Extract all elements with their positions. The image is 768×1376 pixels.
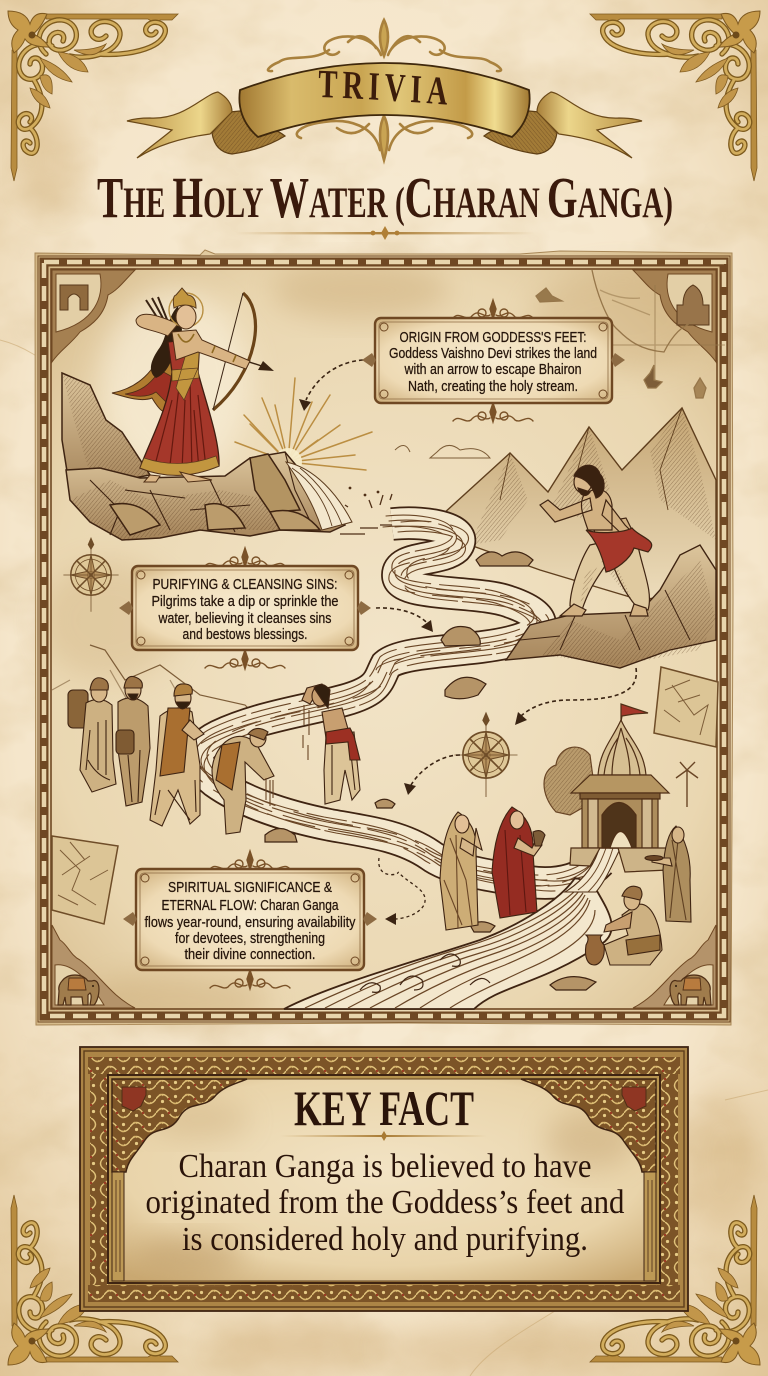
callout: spiritual significance and eternal flow: their divine connection. bbox=[184, 947, 316, 963]
arch spandrel left bbox=[112, 1079, 247, 1172]
map parchment and frame bbox=[35, 250, 733, 1030]
pillar left bbox=[112, 1172, 124, 1281]
woman with offering plate bbox=[645, 826, 691, 922]
palm bbox=[676, 762, 698, 807]
distant hills, middle left bbox=[52, 645, 262, 722]
callout: purifying and cleansing sins: water, believing it cleanses sins bbox=[158, 611, 332, 627]
pillar right bbox=[644, 1172, 656, 1281]
scroll above bbox=[453, 300, 533, 319]
ornate frame bbox=[80, 1047, 688, 1311]
key fact heading: KEY FACT bbox=[294, 1080, 474, 1136]
callout: purifying and cleansing sins: Pilgrims take a dip or sprinkle the bbox=[152, 594, 338, 610]
callout: spiritual significance and eternal flow: ETERNAL FLOW: Charan Ganga bbox=[162, 897, 339, 914]
corner ornament: top left bbox=[8, 11, 178, 181]
icon: elephant right bbox=[670, 975, 711, 1005]
callout: purifying and cleansing sins: PURIFYING & CLEANSING SINS: bbox=[152, 576, 338, 593]
seated devotee with pot bbox=[585, 886, 662, 965]
corner ornament: top right bbox=[590, 11, 760, 181]
bottom corner scroll, right bbox=[633, 925, 716, 1008]
callout: origin from goddess's feet: Goddess Vaishno Devi strikes the land bbox=[389, 346, 597, 362]
scroll below bbox=[210, 970, 290, 989]
icon: compass left bbox=[63, 538, 119, 612]
key fact body bbox=[146, 1148, 625, 1258]
old map sheet, right bbox=[654, 667, 718, 747]
ornament below ribbon bbox=[297, 116, 472, 160]
quiver bbox=[146, 297, 168, 325]
waterfall and splash bbox=[286, 462, 401, 534]
feet bbox=[144, 472, 212, 482]
gold hem and waist bbox=[140, 338, 219, 475]
pilgrim praying in ochre bbox=[150, 684, 204, 826]
left ribbon tail bbox=[127, 92, 285, 158]
callout: spiritual significance and eternal flow bbox=[123, 851, 377, 989]
goddess Vaishno Devi with bow bbox=[112, 288, 274, 482]
pilgrim bending to collect water bbox=[212, 728, 274, 834]
scroll above bbox=[205, 548, 285, 567]
title divider bbox=[235, 226, 535, 240]
ribbon banner with TRIVIA bbox=[126, 17, 642, 164]
callout: origin from goddess's feet: with an arrow to escape Bhairon bbox=[404, 362, 582, 378]
scroll above bbox=[210, 851, 290, 870]
red sari bbox=[140, 338, 219, 475]
trivia heading bbox=[318, 70, 447, 105]
bow and arrow bbox=[202, 293, 274, 410]
old map sheet, left bbox=[52, 836, 118, 924]
arrow: river to spiritual label bbox=[379, 858, 425, 925]
corner arch: domed monument bbox=[633, 270, 716, 362]
Bhairon Nath running figure bbox=[540, 465, 652, 616]
rocks under the man bbox=[506, 545, 716, 668]
callout: purifying and cleansing sins: and bestows blessings. bbox=[182, 627, 308, 643]
key fact body: Charan Ganga is believed to have bbox=[178, 1148, 592, 1185]
river: middle course bbox=[189, 515, 609, 891]
main title: THE HOLY WATER (CHARAN GANGA) bbox=[97, 165, 673, 230]
arch spandrel right bbox=[521, 1079, 656, 1172]
right ribbon tail bbox=[484, 92, 642, 158]
ornament above ribbon bbox=[268, 20, 501, 71]
arrow: origin label to burst bbox=[299, 360, 363, 411]
corner ornament: bottom right bbox=[590, 1195, 760, 1365]
key fact divider bbox=[280, 1131, 487, 1141]
woman in red sari holding vessel bbox=[492, 807, 545, 918]
panel: illustrated map bbox=[35, 250, 733, 1030]
icon: compass right bbox=[454, 713, 518, 797]
lower rocks and river stones bbox=[265, 552, 596, 990]
burst where arrow strikes bbox=[235, 378, 372, 476]
arrow: compass to river bbox=[404, 755, 460, 795]
corner ornament: bottom left bbox=[8, 1195, 178, 1365]
callout: purifying and cleansing sins bbox=[119, 548, 371, 669]
icon: elephant left bbox=[58, 975, 99, 1005]
rocky cliff under goddess bbox=[62, 373, 345, 540]
scroll below bbox=[205, 650, 285, 669]
stream from temple bbox=[565, 845, 622, 892]
callout: spiritual significance and eternal flow: for devotees, strengthening bbox=[175, 931, 325, 947]
callout: origin from goddess's feet: ORIGIN FROM GODDESS'S FEET: bbox=[400, 329, 586, 346]
callout: spiritual significance and eternal flow: SPIRITUAL SIGNIFICANCE & bbox=[168, 879, 332, 896]
pilgrim with backpack bbox=[68, 678, 116, 792]
temple with flag bbox=[544, 704, 698, 872]
river: wide lower delta bbox=[284, 878, 612, 1009]
ribbon main band bbox=[239, 63, 530, 137]
flowing cape bbox=[112, 342, 178, 412]
pilgrim pouring water over head bbox=[302, 684, 360, 804]
necklace and armlets bbox=[178, 334, 236, 362]
corner arch: gateway bbox=[52, 270, 135, 362]
arrow: purifying label to river bbox=[376, 608, 433, 632]
faded coastline map bbox=[536, 270, 725, 398]
arrow: rocks to compass bbox=[515, 668, 636, 725]
inner parchment bbox=[112, 1079, 656, 1281]
callout: origin from goddess's feet: Nath, creating the holy stream. bbox=[408, 379, 578, 395]
flag bbox=[621, 704, 648, 722]
key fact body: originated from the Goddess’s feet and bbox=[146, 1184, 625, 1221]
arms and torso bbox=[136, 314, 250, 369]
head halo and crown bbox=[169, 293, 203, 327]
key fact body: is considered holy and purifying. bbox=[182, 1221, 588, 1258]
pilgrim with satchel bbox=[116, 676, 150, 806]
woman in tan sari praying bbox=[440, 812, 482, 930]
panel: key fact bbox=[80, 1047, 688, 1311]
tree bbox=[544, 747, 596, 815]
callout: origin from goddess's feet bbox=[362, 300, 625, 422]
callout: spiritual significance and eternal flow: flows year-round, ensuring availability bbox=[144, 915, 356, 931]
scroll below bbox=[453, 403, 533, 422]
mountains, upper right bbox=[395, 408, 716, 600]
hair bbox=[151, 306, 182, 378]
bottom corner scroll, left bbox=[52, 925, 135, 1008]
trivia heading: TRIVIA bbox=[318, 70, 447, 105]
